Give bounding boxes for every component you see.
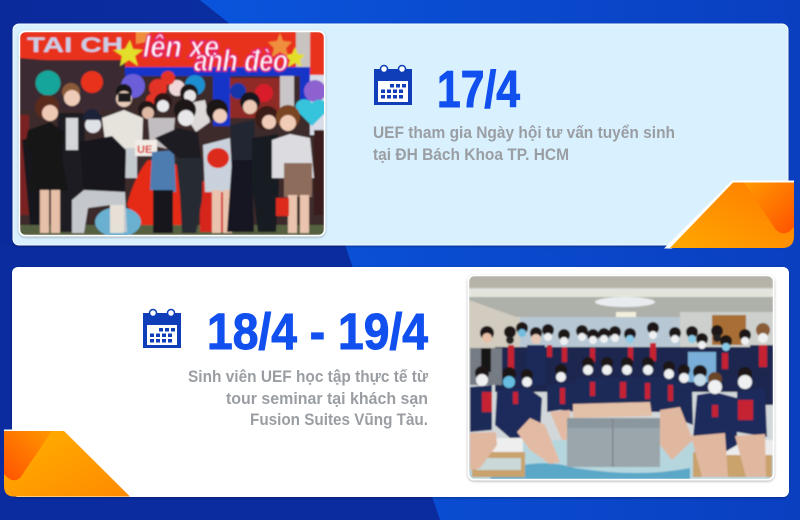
floor and sofas (469, 440, 773, 479)
balloons and signs (36, 70, 60, 96)
UEF sign (135, 140, 157, 156)
denim boy (150, 150, 176, 192)
corner accent: orange bottom panel (4, 430, 134, 497)
photo: students at booth (18, 29, 327, 237)
photo: students at booth: TAI CH (27, 34, 123, 57)
icon: calendar (143, 310, 181, 348)
date: 18/4 - 19/4: 18/4 - 19/4 (207, 303, 429, 360)
girl left (35, 95, 59, 119)
banner lettering: lên xe (143, 29, 219, 64)
description: 18/4 - 19/4 (188, 368, 428, 429)
boy glasses (56, 113, 86, 232)
panel: 17/4 event (13, 24, 794, 248)
description: 17/4: tại ĐH Bách Khoa TP. HCM (373, 146, 569, 164)
white shirt boy (100, 108, 144, 150)
girl black (255, 106, 279, 130)
date: 17/4: 17/4 (437, 61, 520, 119)
legs (470, 432, 497, 470)
panel: 18/4 - 19/4 event (4, 267, 789, 497)
description: 18/4 - 19/4: tour seminar tại khách sạn (226, 390, 428, 408)
kneeling boy (80, 136, 126, 192)
girl crop top (174, 99, 196, 121)
photo: students at booth: anh đèo (194, 43, 288, 78)
front row bodies (470, 385, 492, 432)
back people (20, 115, 29, 215)
blue arch (125, 67, 310, 76)
tall boy (240, 92, 260, 112)
icon: calendar (374, 66, 412, 105)
description: 18/4 - 19/4: Fusion Suites Vũng Tàu. (250, 411, 428, 429)
description: 17/4: UEF tham gia Ngày hội tư vấn tuyển sinh (373, 124, 675, 142)
girl white dress (206, 99, 228, 121)
photo: students at booth: UE (137, 144, 152, 156)
corner accent: orange top panel (664, 180, 794, 248)
description: 17/4 (373, 124, 675, 164)
scooter (127, 160, 182, 225)
description: 18/4 - 19/4: Sinh viên UEF học tập thực tế từ (188, 368, 428, 386)
table (566, 427, 661, 468)
girl right (276, 105, 300, 129)
back row bodies (495, 347, 765, 392)
photo: students at hotel (468, 274, 774, 480)
